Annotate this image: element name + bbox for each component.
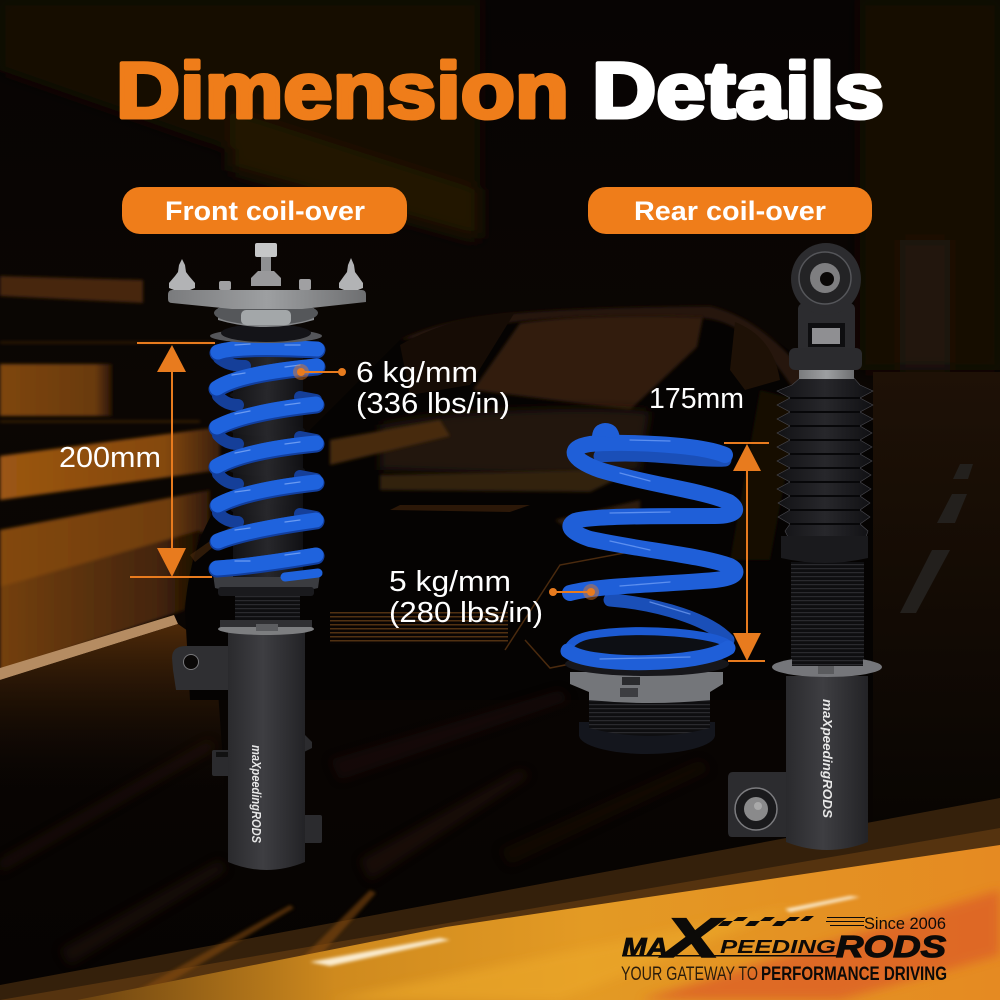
- spring highlights: [232, 344, 300, 561]
- rear spring rate callout: 5 kg/mm: [389, 566, 511, 598]
- blue spring coil undersides: [217, 349, 317, 569]
- spring back strands: [218, 358, 316, 522]
- lower body: [786, 676, 868, 850]
- spring seat base: [565, 652, 729, 754]
- title word: Dimension: Dimension: [116, 46, 569, 134]
- collar: [772, 650, 882, 677]
- logo: underline: [622, 955, 838, 956]
- bright highlights: [310, 938, 450, 966]
- pill: Front coil-over: [122, 187, 407, 234]
- bottom swoosh bright layer: [77, 845, 1000, 1000]
- title: [116, 46, 884, 134]
- spring seat: [213, 574, 320, 596]
- front coil-over strut: [168, 243, 366, 870]
- neck and collar: [789, 303, 862, 379]
- top mount bolts: [169, 243, 363, 290]
- logo: tagline: YOUR GATEWAY TO: [621, 964, 758, 985]
- logo: checker flag: [718, 916, 814, 926]
- car roof outline: [400, 306, 830, 410]
- buildings at top: [0, 0, 1000, 370]
- lower bracket: [728, 772, 790, 837]
- front spring rate callout: 6 kg/mm: [356, 357, 478, 389]
- logo: since 2006: Since 2006: [864, 914, 946, 933]
- top eye: [791, 243, 861, 315]
- front dimension label: 200mm: [59, 442, 161, 474]
- orange streaks over swoosh: [120, 890, 376, 1000]
- pill: Rear coil-over: [588, 187, 872, 234]
- red orange streaks: [640, 890, 1000, 1000]
- front spring rate callout: (336 lbs/in): [356, 388, 510, 420]
- seat inner: [569, 631, 725, 661]
- top mount plate: [168, 279, 366, 327]
- car hood: [380, 408, 650, 478]
- rear dimension label: 175mm: [649, 383, 744, 415]
- logo on body: maXpeedingRODS: [820, 699, 835, 818]
- car left fender line: [190, 520, 242, 562]
- logo: speed lines: [826, 917, 865, 926]
- logo: peeding: PEEDING: [720, 937, 836, 957]
- rear spring rate callout: (280 lbs/in): [389, 597, 543, 629]
- car windshield: [473, 316, 703, 410]
- lower road streaks: [0, 690, 710, 965]
- spring tip: [592, 423, 620, 438]
- brand logo: [621, 906, 947, 985]
- blue rear spring: [570, 443, 735, 593]
- logo: rods: RODS: [836, 929, 946, 964]
- blue spring coils: [217, 348, 318, 577]
- logo: X: X: [660, 906, 725, 969]
- white road streak: [0, 615, 178, 680]
- rear spring assembly: [565, 423, 735, 754]
- front spring rate callout: [293, 357, 510, 420]
- bottom swoosh layer 2: [0, 828, 1000, 1000]
- road below streak: [0, 624, 225, 800]
- rear spring rate callout: [389, 566, 599, 629]
- rear spring highlights: [600, 440, 690, 659]
- boot: [777, 378, 873, 563]
- logo: ma: MA: [622, 932, 668, 962]
- spring back strands: [600, 455, 728, 640]
- car silhouette: [185, 306, 880, 700]
- lower strut body: [172, 632, 322, 870]
- threaded cylinder: [791, 562, 864, 662]
- pill: Front coil-over: Front coil-over: [165, 196, 366, 226]
- right road: [873, 372, 1000, 850]
- upper spring seat: [210, 324, 322, 343]
- bottom swoosh layer 1: [0, 798, 1000, 1000]
- title word: Details: Details: [592, 46, 884, 134]
- strut logo: maXpeedingRODS: [249, 745, 264, 843]
- left road light bands: [0, 276, 220, 672]
- bottom coil: [567, 631, 729, 665]
- rear shock absorber: [728, 243, 882, 850]
- dust boot: [229, 355, 305, 577]
- rear dimension arrow: 175mm: [724, 442, 769, 662]
- pill: Rear coil-over: Rear coil-over: [634, 196, 827, 226]
- front dimension arrow: 200mm: [130, 342, 215, 578]
- car grille: [330, 612, 508, 644]
- brand logo: PERFORMANCE DRIVING: [761, 964, 947, 985]
- thread and collar: [218, 595, 314, 635]
